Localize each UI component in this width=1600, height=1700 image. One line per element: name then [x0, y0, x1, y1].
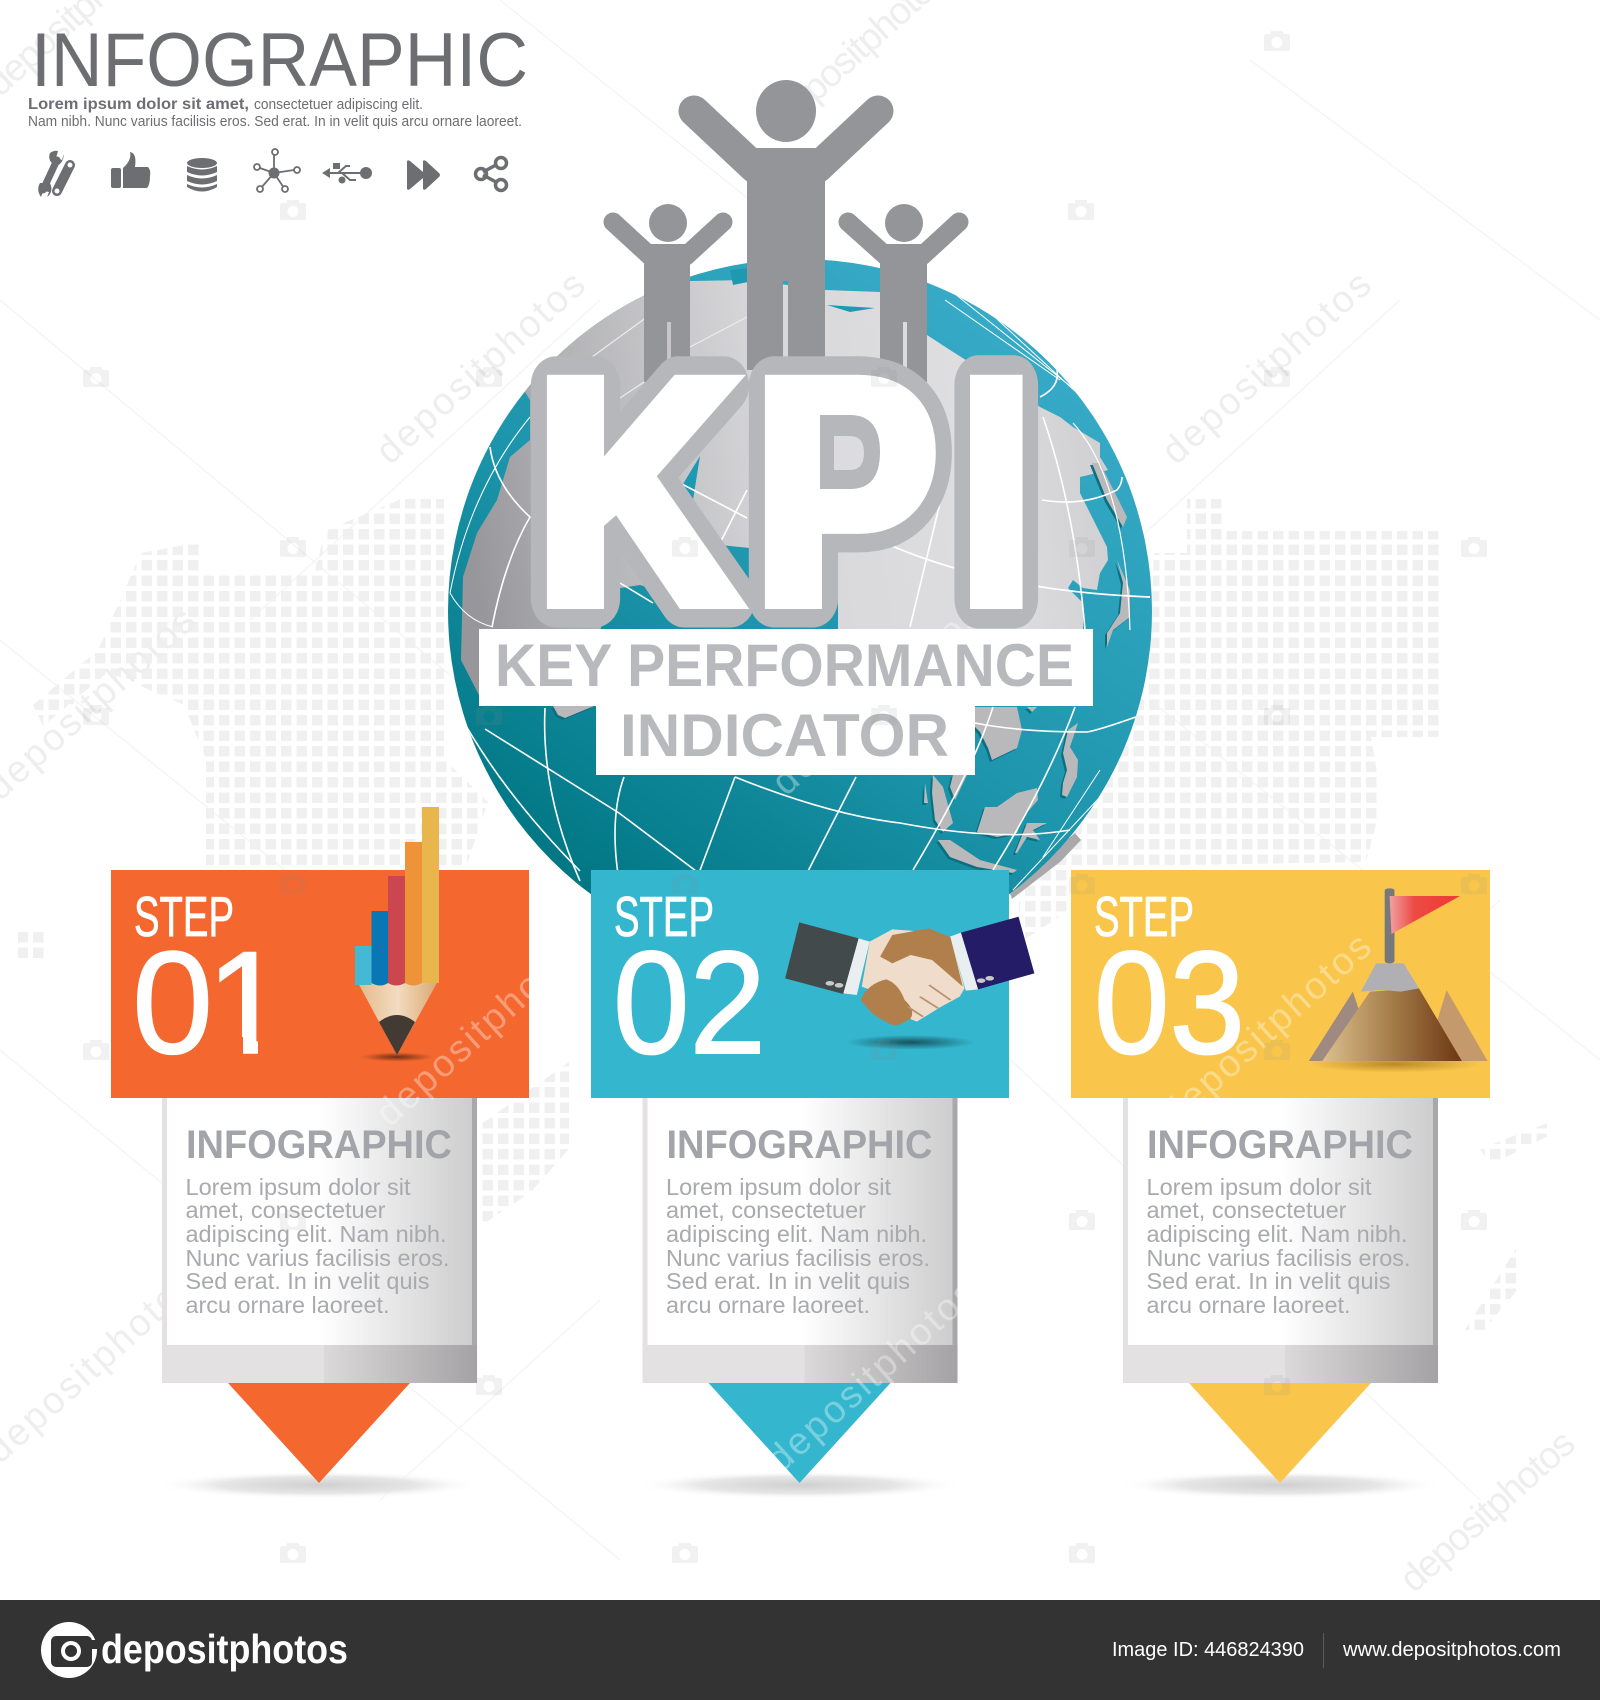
- card 1 body text: arcu ornare laoreet.: [186, 1292, 390, 1318]
- card 3 body text: Lorem ipsum dolor sit: [1146, 1174, 1372, 1200]
- subtitle text block: [28, 96, 522, 130]
- banner: key performance indicator: KEY PERFORMANCE: [495, 632, 1074, 699]
- card 1 body text: [186, 1174, 450, 1318]
- card 3 heading: INFOGRAPHIC: [1147, 1123, 1413, 1167]
- step 01 label: STEP: [134, 885, 234, 949]
- letter I: I: [962, 319, 1031, 665]
- letter K: K: [538, 318, 733, 665]
- panel: step 02: [591, 870, 1034, 1098]
- watermark camera marks: [83, 31, 1487, 1563]
- card 3 body text: amet, consectetuer: [1146, 1197, 1347, 1223]
- footer bar: [0, 1600, 1600, 1700]
- step 01 number: 01: [132, 921, 287, 1084]
- icon: handshake: [785, 917, 1034, 1050]
- card 2 body text: arcu ornare laoreet.: [666, 1292, 870, 1318]
- card 2 arrow: [708, 1383, 890, 1483]
- card 2 body text: adipiscing elit. Nam nibh.: [666, 1221, 927, 1247]
- right small figure: [848, 204, 959, 382]
- watermark text on background: depositphotos: [1392, 1422, 1584, 1601]
- card 1 body text: Nunc varius facilisis eros.: [186, 1245, 450, 1271]
- footer logo text: depositphotos: [101, 1626, 348, 1672]
- card 3 body text: arcu ornare laoreet.: [1146, 1292, 1350, 1318]
- card 2 body text: amet, consectetuer: [666, 1197, 866, 1223]
- card 2 shadow: [634, 1471, 964, 1499]
- card 3 shadow: [1115, 1471, 1445, 1499]
- letter K: K: [538, 318, 733, 665]
- card 3 lower panel: [1115, 1098, 1445, 1499]
- card 1 body text: Lorem ipsum dolor sit: [186, 1174, 411, 1200]
- footer image id: Image ID: 446824390: [1112, 1639, 1304, 1661]
- panel: step 01: [111, 807, 529, 1098]
- card 2 heading: INFOGRAPHIC: [666, 1123, 932, 1167]
- footer logo icon: [41, 1622, 97, 1678]
- icon: thumbs up: [111, 152, 150, 188]
- card 3 body text: Sed erat. In in velit quis: [1146, 1268, 1390, 1294]
- card 1 paper body: [162, 1098, 477, 1383]
- icon: share: [476, 158, 506, 190]
- icon: fast forward: [407, 160, 440, 190]
- subtitle text block: Nam nibh. Nunc varius facilisis eros. Sed erat. In in velit quis arcu ornare laoreet.: [28, 114, 522, 130]
- banner: key performance indicator: INDICATOR: [620, 702, 949, 769]
- card 1 shadow: [154, 1471, 484, 1499]
- letter I: I: [962, 319, 1031, 665]
- icon row: [38, 149, 506, 197]
- card 2 paper body: [642, 1098, 958, 1383]
- icon: wrench and spanner: [38, 151, 72, 197]
- globe: [448, 259, 1152, 963]
- subtitle text block: consectetuer adipiscing elit.: [254, 97, 423, 113]
- watermark text on globe: depositphotos: [764, 594, 990, 804]
- banner: key performance indicator: [479, 629, 1093, 775]
- card 3 arrow: [1189, 1383, 1371, 1483]
- step 02 number: 02: [613, 921, 766, 1084]
- card 3 paper body: [1123, 1098, 1438, 1383]
- panel: step 03: [1071, 870, 1490, 1098]
- card 1 lower panel: [154, 1098, 484, 1499]
- globe grid lines: [450, 285, 1150, 890]
- icon: pencil bar chart: [355, 807, 439, 1062]
- card 1 body text: amet, consectetuer: [186, 1197, 386, 1223]
- card 1 body text: Sed erat. In in velit quis: [186, 1268, 430, 1294]
- letter P: P: [756, 318, 936, 665]
- step 03 label: STEP: [1094, 885, 1194, 949]
- watermark text on panels: depositphotos: [1154, 925, 1380, 1135]
- footer website: www.depositphotos.com: [1342, 1639, 1561, 1661]
- watermark text on background: depositphotos: [368, 263, 594, 473]
- watermark text on panels: depositphotos: [368, 925, 594, 1135]
- watermark text on panels: depositphotos: [759, 1271, 985, 1481]
- watermark text on panels: [368, 925, 1380, 1481]
- KPI big letters: [538, 318, 1031, 665]
- card 2 body text: Sed erat. In in velit quis: [666, 1268, 910, 1294]
- card 1 arrow: [228, 1383, 410, 1483]
- subtitle text block: Lorem ipsum dolor sit amet,: [28, 96, 249, 113]
- letter P counter: [820, 415, 880, 489]
- step 02 label: STEP: [614, 885, 714, 949]
- main title: INFOGRAPHIC: [31, 18, 528, 103]
- step 03 number: 03: [1094, 921, 1245, 1084]
- card 3 body text: adipiscing elit. Nam nibh.: [1146, 1221, 1408, 1247]
- watermark text on background: depositphotos: [1154, 263, 1380, 473]
- card 2 body text: Nunc varius facilisis eros.: [666, 1245, 930, 1271]
- icon: mountain flag: [1309, 888, 1488, 1073]
- card 3 body text: Nunc varius facilisis eros.: [1146, 1245, 1410, 1271]
- letter P: P: [756, 318, 936, 665]
- left small figure: [613, 204, 723, 382]
- card 2 body text: [666, 1174, 930, 1318]
- icon: database: [187, 158, 217, 192]
- icon: usb symbol: [322, 163, 372, 184]
- card 3 body text: [1146, 1174, 1410, 1318]
- globe landmasses: [461, 268, 1130, 875]
- icon: network nodes: [254, 149, 300, 192]
- card 2 lower panel: [634, 1098, 964, 1499]
- card 2 body text: Lorem ipsum dolor sit: [666, 1174, 891, 1200]
- dotted world map background: [0, 480, 1560, 1340]
- card 1 body text: adipiscing elit. Nam nibh.: [186, 1221, 446, 1247]
- people figures: [613, 80, 959, 382]
- card 1 heading: INFOGRAPHIC: [186, 1123, 452, 1167]
- center large figure: [694, 80, 878, 370]
